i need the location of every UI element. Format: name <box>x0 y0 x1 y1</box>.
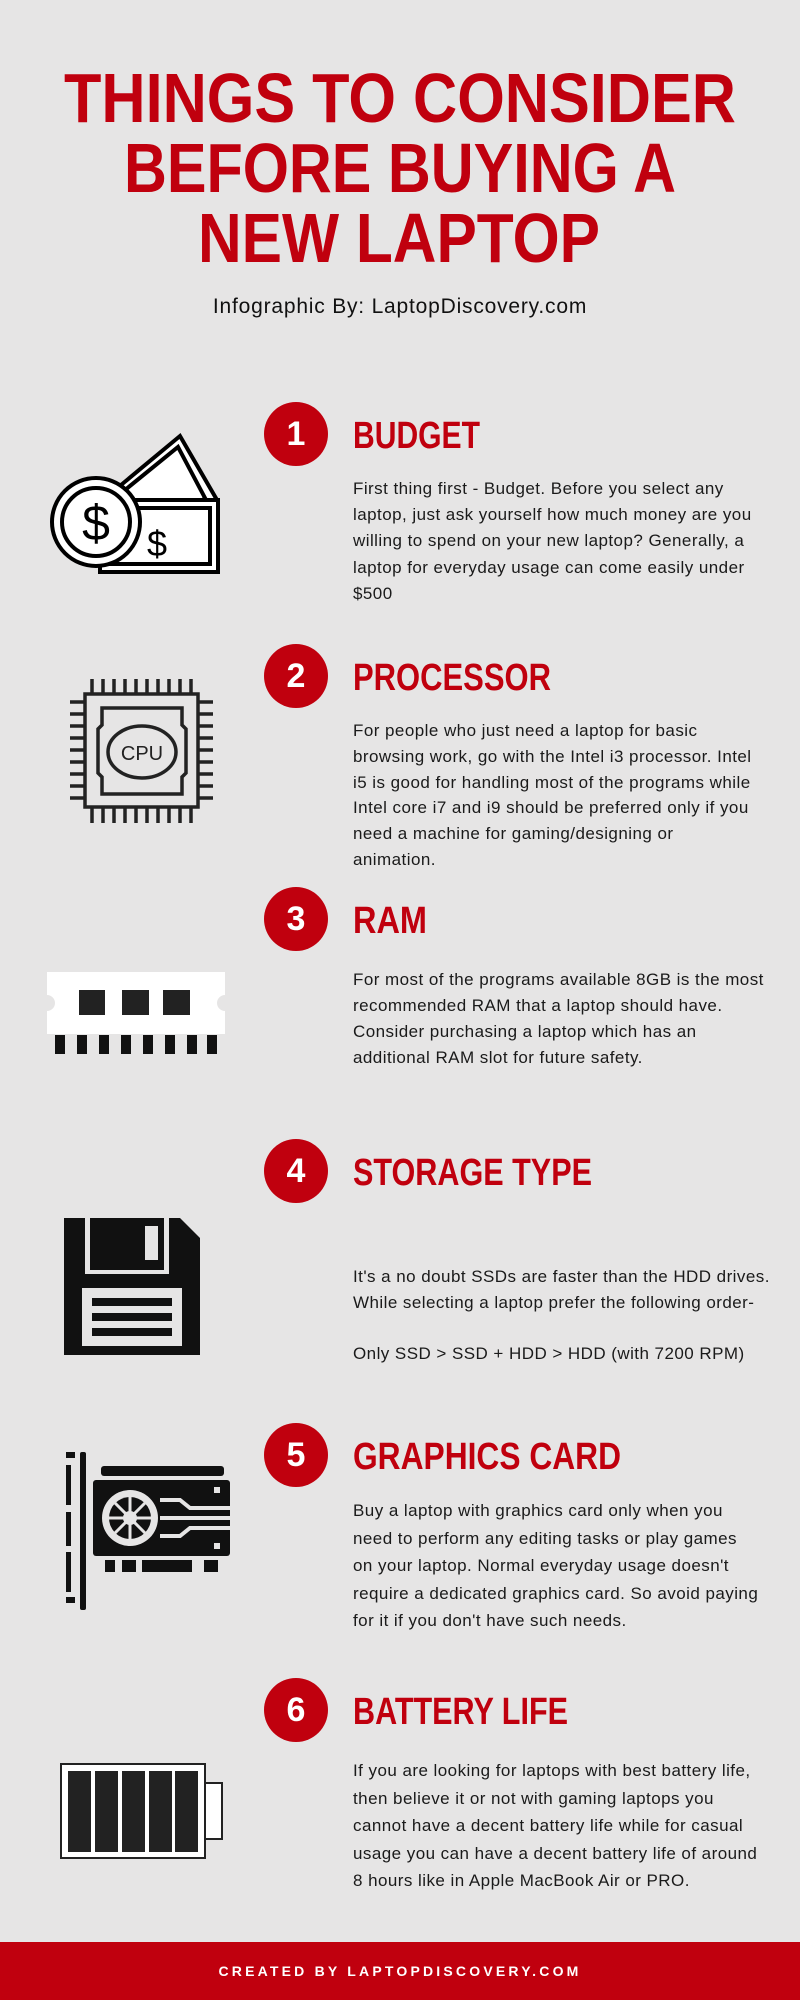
section 3: ram <box>264 887 764 1067</box>
footer: CREATED BY LAPTOPDISCOVERY.COM <box>218 1963 582 1979</box>
text: storage: Only SSD > SSD + HDD > HDD (with 7200 RPM) <box>353 1344 745 1362</box>
text: graphics: need to perform any editing tasks or play games <box>353 1528 737 1548</box>
number 1: 1 <box>287 415 305 453</box>
icon: money: $ <box>82 495 110 551</box>
text: battery: 8 hours like in Apple MacBook Air or PRO. <box>353 1871 690 1890</box>
subtitle: Infographic By: LaptopDiscovery.com <box>213 295 587 318</box>
number 6: 6 <box>287 1691 305 1729</box>
heading: budget: BUDGET <box>353 415 480 456</box>
section 2: processor <box>264 644 752 869</box>
text: processor: For people who just need a laptop for basic <box>353 721 697 740</box>
number 2 <box>264 644 328 708</box>
icon: cpu: CPU <box>121 743 163 765</box>
text: graphics: require a dedicated graphics card. So avoid paying <box>353 1584 758 1602</box>
text: budget: laptop for everyday usage can come easily under <box>353 558 745 577</box>
text: battery <box>353 1761 757 1890</box>
icon: graphics card <box>66 1452 230 1610</box>
icon: money: $ <box>147 523 167 564</box>
icon: ram stick <box>47 972 225 1054</box>
text: ram: recommended RAM that a laptop should have. <box>353 996 722 1015</box>
text: graphics <box>353 1501 758 1630</box>
number 3 <box>264 887 328 951</box>
number 6 <box>264 1678 328 1742</box>
text: graphics: for it if you don't have such needs. <box>353 1611 627 1630</box>
section 4: storage <box>264 1139 770 1362</box>
text: ram: Consider purchasing a laptop which has an <box>353 1022 697 1041</box>
heading: battery life: BATTERY LIFE <box>353 1691 568 1732</box>
text: storage: It's a no doubt SSDs are faster than the HDD drives. <box>353 1267 770 1286</box>
text: graphics: Buy a laptop with graphics card only when you <box>353 1501 723 1520</box>
text: processor: need a machine for gaming/designing or <box>353 824 673 843</box>
title <box>64 59 736 277</box>
text: budget: $500 <box>353 584 393 603</box>
number 4 <box>264 1139 328 1203</box>
text: processor: Intel core i7 and i9 should be preferred only if you <box>353 798 749 817</box>
section 5: graphics <box>264 1423 758 1630</box>
icon: floppy disk <box>64 1218 200 1355</box>
section 6: battery <box>264 1678 757 1890</box>
text: processor: browsing work, go with the Intel i3 processor. Intel <box>353 747 752 766</box>
text: ram: For most of the programs available 8GB is the most <box>353 970 764 989</box>
footer <box>0 1942 800 2000</box>
icon: cpu <box>70 679 213 823</box>
text: budget <box>353 479 752 603</box>
heading: ram: RAM <box>353 900 427 941</box>
section 1: budget <box>264 402 752 603</box>
text: ram <box>353 970 764 1067</box>
text: processor <box>353 721 752 869</box>
text: graphics: on your laptop. Normal everyday usage doesn't <box>353 1556 729 1575</box>
heading: storage type: STORAGE TYPE <box>353 1152 592 1193</box>
text: battery: If you are looking for laptops with best battery life, <box>353 1761 751 1780</box>
icon: money <box>50 433 220 574</box>
text: ram: additional RAM slot for future safety. <box>353 1048 643 1067</box>
number 3: 3 <box>287 900 305 938</box>
text: storage: While selecting a laptop prefer the following order- <box>353 1292 754 1312</box>
number 4: 4 <box>287 1152 305 1190</box>
icon: battery <box>60 1763 223 1859</box>
text: storage <box>353 1267 770 1362</box>
number 2: 2 <box>287 657 305 695</box>
text: battery: usage you can have a decent battery life of around <box>353 1844 757 1862</box>
text: processor: animation. <box>353 850 436 869</box>
text: budget: willing to spend on your new laptop? Generally, a <box>353 531 744 550</box>
title: NEW LAPTOP <box>198 199 600 277</box>
text: battery: cannot have a decent battery life while for casual <box>353 1816 743 1835</box>
number 1 <box>264 402 328 466</box>
text: budget: laptop, just ask yourself how much money are you <box>353 505 752 524</box>
text: budget: First thing first - Budget. Before you select any <box>353 479 724 498</box>
heading: processor: PROCESSOR <box>353 657 551 698</box>
text: battery: then believe it or not with gaming laptops you <box>353 1788 714 1808</box>
number 5: 5 <box>287 1436 305 1474</box>
title: BEFORE BUYING A <box>124 129 676 207</box>
text: processor: i5 is good for handling most of the programs while <box>353 773 751 792</box>
number 5 <box>264 1423 328 1487</box>
